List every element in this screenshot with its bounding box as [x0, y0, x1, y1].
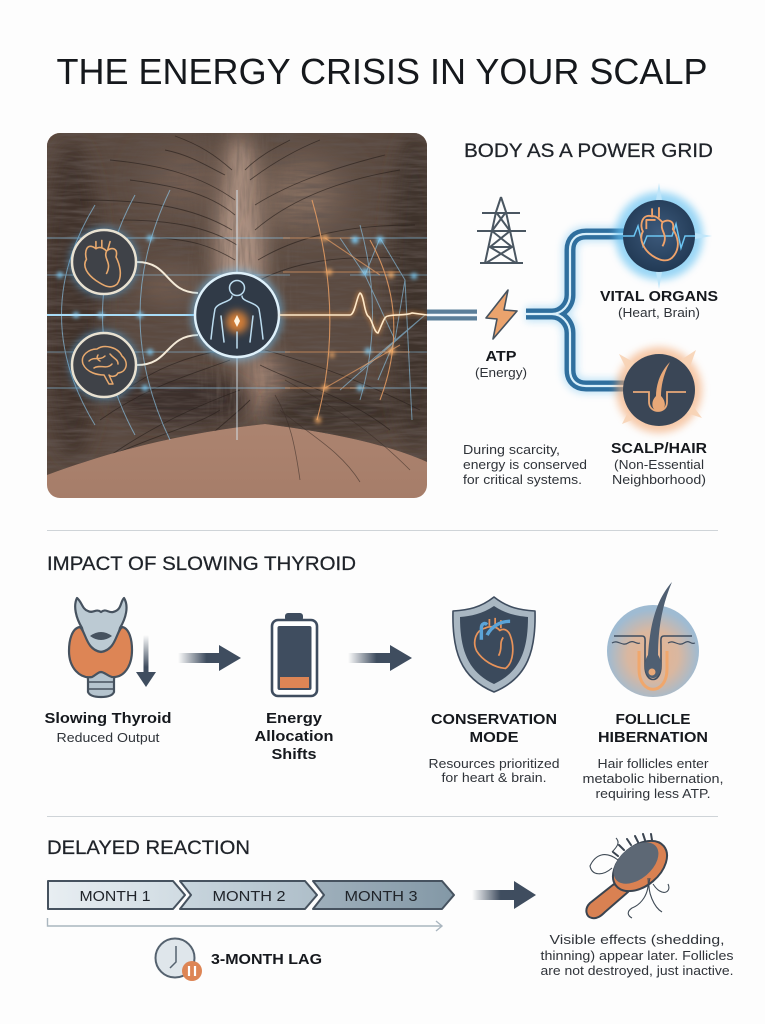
text: conservation mode: Resources prioritized: [428, 757, 560, 771]
label: ATP: ATP: [486, 349, 517, 365]
text: conservation mode: MODE: [470, 730, 519, 746]
connectors: organs to body: [47, 262, 198, 365]
heading: delayed reaction: DELAYED REACTION: [47, 838, 250, 859]
title: THE ENERGY CRISIS IN YOUR SCALP: [56, 51, 708, 92]
power line from scalp: [427, 308, 477, 322]
panel: scalp photo with energy grid overlay: [42, 130, 441, 498]
text: visible effects: Visible effects (shedding,: [550, 933, 724, 947]
icon: pylon: [477, 197, 526, 263]
text: visible effects: thinning) appear later. Follicles: [540, 949, 734, 963]
text: conservation mode: for heart & brain.: [442, 771, 546, 785]
lag span arrow: [48, 918, 442, 931]
month 1: [48, 881, 185, 909]
power lines: branches to organs and scalp: [526, 234, 630, 386]
icon: body badge: [191, 269, 283, 361]
icon: hairbrush with shed hairs: [586, 831, 677, 918]
text: energy allocation shifts: Allocation: [254, 729, 334, 745]
label: vital organs: VITAL ORGANS: [600, 289, 718, 305]
energy grid: glowing nodes: [57, 235, 417, 423]
text: scarcity note: [463, 443, 587, 487]
arrow: timeline to brush: [472, 881, 536, 909]
icon: brain badge: [69, 330, 139, 400]
label: ATP: [475, 349, 527, 380]
text: follicle hibernation: [582, 712, 724, 801]
month 1: MONTH 1: [80, 888, 150, 905]
label: scalp and hair: [611, 441, 708, 487]
text: follicle hibernation: HIBERNATION: [598, 730, 708, 746]
text: slowing thyroid: Slowing Thyroid: [44, 711, 172, 727]
heading: impact of slowing thyroid: IMPACT OF SLOWING THYROID: [47, 554, 356, 575]
icon: low battery: [272, 613, 317, 696]
text: follicle hibernation: requiring less ATP.: [596, 787, 710, 801]
text: energy allocation shifts: Shifts: [272, 747, 316, 763]
text: slowing thyroid: Reduced Output: [56, 731, 160, 745]
icon: clock with pause: [156, 938, 202, 981]
icon: lightning bolt: [486, 290, 517, 339]
label: scalp and hair: SCALP/HAIR: [611, 441, 708, 457]
label: ATP: (Energy): [475, 366, 527, 380]
arrow: thyroid to battery: [178, 645, 241, 671]
text: follicle hibernation: metabolic hibernation,: [582, 772, 724, 786]
arrow: battery to shield: [348, 645, 412, 671]
text: slowing thyroid: [44, 711, 172, 745]
month 2: [180, 881, 317, 909]
text: scarcity note: During scarcity,: [463, 443, 560, 457]
label: 3-month lag: 3-MONTH LAG: [211, 952, 322, 968]
icon: conservation shield: [453, 597, 535, 692]
text: conservation mode: [428, 712, 560, 785]
text: energy allocation shifts: [254, 711, 334, 763]
timeline chevrons: [48, 881, 454, 909]
text: follicle hibernation: FOLLICLE: [616, 712, 691, 728]
heading: body as a power grid: BODY AS A POWER GRID: [464, 141, 713, 162]
energy grid: orange lines: [283, 200, 410, 420]
label: scalp and hair: Neighborhood): [612, 473, 706, 487]
month 3: MONTH 3: [344, 888, 418, 905]
text: scarcity note: for critical systems.: [463, 473, 582, 487]
month 2: MONTH 2: [212, 888, 286, 905]
month 3: [313, 881, 454, 909]
pulse line: [280, 293, 427, 333]
label: vital organs: (Heart, Brain): [618, 306, 700, 320]
text: visible effects: [540, 933, 734, 978]
arrow: output falling: [136, 635, 156, 687]
text: energy allocation shifts: Energy: [266, 711, 322, 727]
text: visible effects: are not destroyed, just inactive.: [540, 964, 734, 978]
energy grid: blue lines: [47, 190, 427, 440]
icon: heart badge: [69, 227, 139, 297]
icon: vital organs orb: [615, 183, 712, 289]
icon: scalp orb: [616, 347, 702, 433]
label: scalp and hair: (Non-Essential: [614, 458, 704, 472]
text: conservation mode: CONSERVATION: [431, 712, 557, 728]
icon: thyroid: [69, 598, 132, 697]
text: scarcity note: energy is conserved: [463, 458, 587, 472]
label: vital organs: [600, 289, 718, 320]
icon: follicle hibernation: [607, 582, 699, 697]
text: follicle hibernation: Hair follicles enter: [598, 757, 708, 771]
